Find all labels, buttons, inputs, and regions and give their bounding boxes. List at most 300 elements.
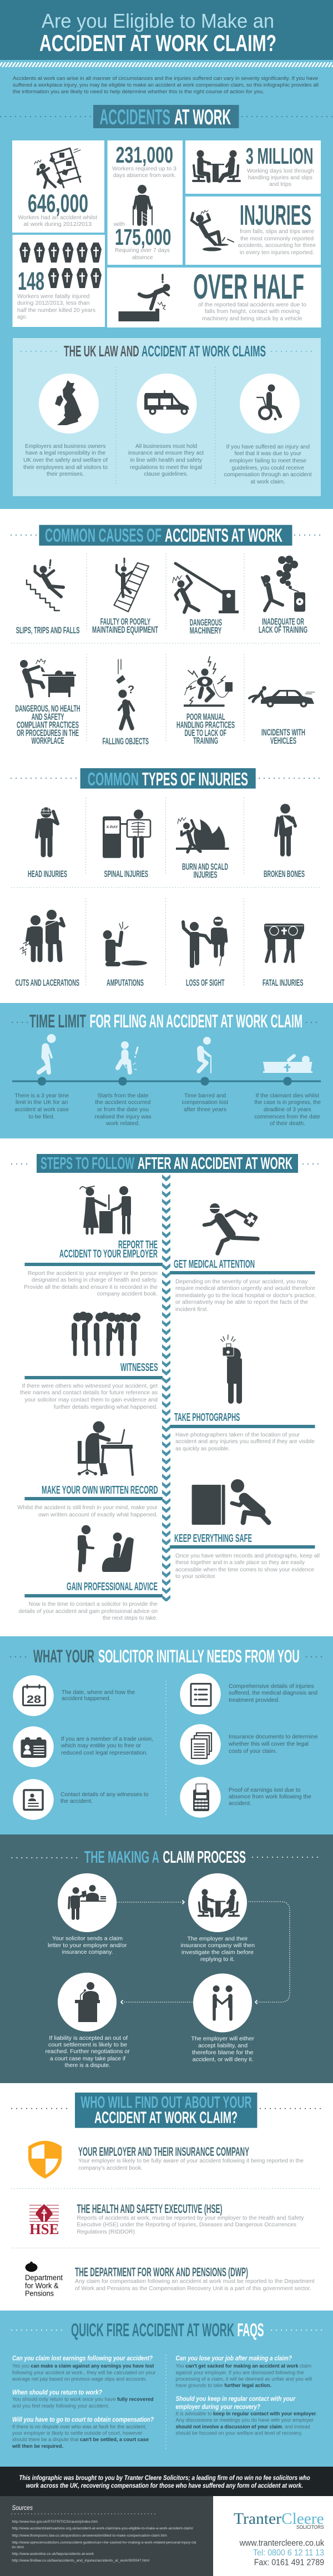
stat caption: and trips <box>269 182 291 188</box>
step heading: MAKE YOUR OWN WRITTEN RECORD <box>42 1484 158 1496</box>
panel: the making a claim process <box>0 1834 333 2083</box>
panel: time limit <box>0 1003 333 1138</box>
stat caption: of the reported fatal accidents were due to <box>198 302 306 308</box>
panel: over half <box>107 268 321 327</box>
faq: losing your job: have grounds to take further legal action. <box>175 2383 271 2388</box>
faq: regular contact: Should you keep in regular contact with your <box>175 2395 296 2403</box>
step text: company accident book. <box>97 1291 158 1297</box>
text: proof of earnings: accident. <box>229 1801 251 1807</box>
faq: going to court: will then be required. <box>12 2443 63 2449</box>
step text: the next steps to take. <box>103 1615 158 1621</box>
text: claim letter <box>48 1936 127 1955</box>
heading: common types of injuries: COMMON <box>88 769 139 789</box>
faq: going to court: your employer is likely to settle outside of court, however <box>12 2431 142 2436</box>
stat caption <box>247 168 314 188</box>
stat caption: absence <box>132 255 153 261</box>
step text <box>175 1553 320 1580</box>
text: settlement: court settlement is likely to be <box>48 2042 127 2048</box>
icon: person with knee injury <box>118 1041 138 1072</box>
label: SPINAL INJURIES <box>104 869 148 879</box>
faq: regular contact: Any discussions or meetings you do have with your employer <box>175 2417 314 2423</box>
stat caption: days absence from work. <box>113 173 176 179</box>
text: start date: realised the injury was <box>95 1114 152 1120</box>
text: claim letter: insurance company. <box>62 1949 113 1955</box>
logo: Tranter Cleere Solicitors: SOLICITORS <box>296 2524 324 2530</box>
logo: DWP: Department <box>25 2273 63 2282</box>
source links: http://www.asdonline.co.uk/faqs/accidents-at-work <box>12 2552 94 2556</box>
stat caption <box>238 229 316 256</box>
panel: light blue introduction background <box>0 67 333 509</box>
icon: person helping injured person <box>20 910 64 960</box>
heading: claim process: CLAIM PROCESS <box>163 1847 246 1867</box>
text: investigation: replying to it. <box>200 1957 235 1963</box>
label: CUTS AND LACERATIONS <box>16 977 79 988</box>
label: OR PROCEDURES IN THE <box>17 728 79 738</box>
text: investigation: investigate the claim before <box>181 1950 254 1956</box>
heading: steps to follow <box>12 1153 321 1173</box>
item: department for work and pensions <box>25 2261 315 2298</box>
stat caption <box>112 166 176 179</box>
text: liability decision: The employer will either <box>191 2036 255 2042</box>
item text: Your employer is likely to be fully aware of your accident following it being reported in the <box>78 2158 304 2164</box>
item text <box>75 2278 315 2292</box>
panel: 231,000 and 175,000 absences <box>108 140 183 265</box>
icon: person injured at a saw <box>20 659 76 697</box>
heading: accidents at work: ACCIDENTS <box>100 105 170 129</box>
stat: 231,000: 231,000 <box>115 142 173 168</box>
icon: list of details <box>180 1673 221 1715</box>
step text: incident first. <box>175 1307 208 1313</box>
stat caption: Working days lost through <box>247 168 314 174</box>
stat caption: handling injuries and slips <box>248 175 312 181</box>
step text: Once you have written records and photographs, keep all <box>175 1553 320 1559</box>
text: proof of earnings: Proof of earnings lost due to <box>229 1787 301 1793</box>
label <box>16 703 80 746</box>
step text: to your solicitor. <box>175 1574 216 1580</box>
text: compensation eligibility: compensation through an accident <box>224 472 312 478</box>
icon: calculator <box>180 1777 221 1818</box>
item text: company's accident book. <box>78 2165 143 2171</box>
step: get medical attention <box>170 1203 316 1313</box>
label: DANGEROUS <box>190 617 222 628</box>
heading: accidents at work <box>1 105 333 129</box>
icon: witness contact card <box>13 1779 54 1820</box>
stat caption: from falls, slips and trips were <box>240 229 314 235</box>
cause: slips, trips and falls <box>16 560 80 636</box>
stat caption <box>115 248 170 261</box>
faq: losing your job <box>175 2355 312 2388</box>
icon: calendar <box>13 1675 54 1716</box>
panel: what your solicitor needs <box>0 1636 333 1834</box>
step text: details of your accident and gain professional advice on <box>19 1609 158 1615</box>
icon: two people at a table <box>193 150 240 182</box>
text: claimant death: If the claimant dies whilst <box>256 1093 319 1099</box>
icon: elderly person with cane <box>199 1037 211 1073</box>
logo: Tranter Cleere Solicitors: Cleere <box>281 2510 324 2528</box>
text: injury details: Comprehensive details of injuries <box>229 1683 314 1690</box>
label <box>176 712 235 746</box>
text: start date <box>95 1093 152 1127</box>
label <box>92 617 158 635</box>
intro text: Accidents at work can arise in all manner of circumstances and the injuries suffered can vary in severity significantly. If you have <box>13 75 318 82</box>
stat caption: during 2012/2013, less than <box>17 300 90 306</box>
text: insurance duty: All businesses must hold <box>135 443 197 450</box>
icon: person guiding blind person <box>183 917 226 966</box>
stat caption: Workers had an accident whilst <box>18 215 97 221</box>
step text: Whilst the accident is still fresh in your mind, make your <box>17 1505 158 1511</box>
panel: 148 fatally injured <box>12 235 105 327</box>
text: date of accident: accident happened. <box>62 1696 110 1702</box>
faq: lost earnings: following your accident at work., they will be calculated on your <box>12 2370 155 2376</box>
item: health and safety executive <box>29 2202 304 2237</box>
heading: UK law and accident at work claims: THE UK LAW AND <box>64 342 139 360</box>
icon: insurance documents <box>180 1724 221 1765</box>
injury: fatal injuries <box>263 924 304 988</box>
text: time barred <box>182 1093 228 1113</box>
stat: 646,000: 646,000 <box>28 189 88 218</box>
heading: claim process <box>12 1847 321 1867</box>
icon: group of witnesses <box>73 1312 140 1354</box>
title <box>39 9 276 56</box>
icon: person being electrocuted <box>184 657 233 707</box>
text: insurance duty: regulations to meet the legal <box>130 465 202 471</box>
label <box>259 617 307 635</box>
text: investigation <box>181 1936 255 1963</box>
text: proof of earnings: absence from work following the <box>229 1794 311 1800</box>
faq: losing your job: against your employer. If you are dismissed following the <box>175 2370 304 2376</box>
contact details <box>239 2539 325 2568</box>
text: witness details: Contact details of any witnesses to <box>60 1792 149 1798</box>
cause: inadequate training <box>259 556 307 635</box>
heading: FAQs: FAQS <box>238 2320 264 2340</box>
text: employers responsibility: have a legal responsibility in the <box>26 450 105 456</box>
text: date of accident <box>62 1690 135 1702</box>
step text: these together and in a safe place so they are easily <box>175 1560 305 1566</box>
label: AMPUTATIONS <box>107 977 144 988</box>
arrow: to decision <box>249 1902 290 2004</box>
stat: 148: 148 <box>18 267 44 295</box>
text: time barred: Time barred and <box>184 1093 226 1099</box>
cause: incidents with vehicles <box>249 686 315 746</box>
cause: non-compliant practices <box>16 659 80 746</box>
icon: person at a safe <box>192 1479 269 1525</box>
label: LOSS OF SIGHT <box>186 977 225 988</box>
stat caption: machinery and being struck by a vehicle <box>202 316 302 322</box>
faq: regular contact <box>175 2395 317 2436</box>
text: claimant death: of their death. <box>270 1121 305 1127</box>
panel: 3 million days lost <box>185 140 321 194</box>
stat: 175,000: 175,000 <box>115 224 171 250</box>
icon: ambulance <box>137 374 196 433</box>
text: employers responsibility: their premises. <box>47 471 84 477</box>
step text: as quickly as possible. <box>175 1446 230 1452</box>
label: COMPLIANT PRACTICES <box>17 720 79 730</box>
step text <box>20 1383 158 1410</box>
step text <box>19 1601 158 1621</box>
item: employer and insurer <box>28 2141 304 2179</box>
faq: return to work <box>12 2388 154 2409</box>
step: gain professional advice <box>19 1525 163 1621</box>
logo: DWP: for Work & <box>25 2281 59 2290</box>
logo: Tranter Cleere Solicitors: Tranter <box>234 2510 281 2528</box>
faq: lost earnings: average net pay based on previous wage slips and accounts. <box>12 2376 147 2382</box>
label: HANDLING PRACTICES <box>176 720 235 730</box>
logo: DWP: Pensions <box>25 2289 54 2298</box>
text: start date: Starts from the date <box>98 1093 149 1099</box>
logo: Tranter Cleere Solicitors <box>234 2510 324 2530</box>
text: 3 year limit: accident at work case <box>14 1107 69 1113</box>
text: liability decision: accept liability, and <box>198 2043 248 2049</box>
icon: person at a lectern <box>58 1973 117 2031</box>
icon: union membership card <box>13 1726 54 1767</box>
icon: rows of coffins <box>19 243 102 288</box>
faq: return to work: You should only return to work once you have fully recovered <box>12 2397 154 2402</box>
injury: amputations <box>103 922 147 988</box>
label <box>182 861 228 880</box>
label: WORKPLACE <box>32 735 64 746</box>
source links: http://www.accidentclaimsadvice.org.uk/accident-at-work-claim/are-you-eligible-to-make-a-work-accident-claim/ <box>12 2527 193 2530</box>
text: witness details <box>60 1792 149 1804</box>
cause: falling objects <box>102 659 149 747</box>
item text <box>77 2215 304 2235</box>
heading: solicitor needs <box>11 1646 323 1666</box>
icon: medic running <box>204 1203 258 1253</box>
icon: kneeling person and blood pool <box>103 922 147 966</box>
step heading: WITNESSES <box>120 1362 158 1374</box>
label <box>190 617 222 636</box>
panel: sources <box>0 2496 213 2576</box>
text: compensation eligibility: at work claim. <box>251 479 285 485</box>
item text: Regulations (RIDDOR) <box>77 2229 135 2235</box>
step text: further details regarding what happened. <box>54 1404 158 1410</box>
step divider bar <box>24 1263 163 1266</box>
text: insurance documents <box>228 1734 318 1755</box>
arrow: to settlement <box>121 2000 192 2004</box>
label: INJURIES <box>194 870 218 880</box>
text: with: with <box>113 221 125 228</box>
label: TRAINING <box>193 735 218 746</box>
icon: object falling on person <box>116 659 134 728</box>
step text: Now is the time to contact a solicitor to provide the <box>29 1601 158 1607</box>
faq: losing your job: processing of a claim, it will be deemed as unfair and you will <box>175 2376 312 2382</box>
icon: solicitor sends letter <box>58 1873 117 1932</box>
icon: person writing on a laptop <box>78 1421 133 1475</box>
text: settlement: If liability is accepted an out of <box>49 2035 128 2041</box>
step heading: GAIN PROFESSIONAL ADVICE <box>67 1581 158 1593</box>
stat caption: Workers required up to 3 <box>112 166 176 172</box>
cause: poor manual handling <box>176 657 235 746</box>
text: injury details <box>229 1683 317 1703</box>
item text <box>78 2158 304 2171</box>
icon: object falling on person: ? <box>128 684 134 696</box>
injury: head injuries <box>28 807 67 879</box>
sources heading: Sources <box>12 2504 33 2512</box>
step text: Depending on the severity of your accident, you may <box>175 1279 307 1285</box>
step divider bar <box>24 1376 163 1379</box>
text: claimant death: the case is in progress, the <box>254 1100 321 1106</box>
text: witness details: the accident. <box>60 1798 93 1804</box>
step text: Report the accident to your employer or the person <box>28 1271 158 1277</box>
text: liability decision: accident, or will deny it. <box>193 2057 253 2063</box>
stat caption: Requiring over 7 days <box>115 248 170 254</box>
label: FAULTY OR POORLY <box>100 617 150 627</box>
intro text: the information you are likely to need to help determine whether this is the right course of action for you. <box>13 89 264 95</box>
stat caption <box>17 294 95 320</box>
heading: solicitor needs: WHAT YOUR <box>33 1646 94 1666</box>
icon: person in wheelchair <box>240 374 300 433</box>
text: liability decision: therefore blame for the <box>192 2050 254 2056</box>
text: investigation: insurance company will then <box>181 1943 255 1949</box>
text: insurance duty <box>128 443 204 477</box>
step: keep everything safe <box>170 1479 320 1580</box>
icon: person in coffin <box>263 1056 312 1073</box>
faq: going to court: If there is no dispute over who was at fault for the accident, <box>12 2424 147 2429</box>
step text: accessible when the time comes to show your evidence <box>175 1567 314 1573</box>
stat caption: Workers were fatally injured <box>17 294 90 300</box>
icon: barrier hitting person <box>173 563 239 613</box>
icon: photographer <box>221 1335 242 1401</box>
text: claimant death: deadline of 3 years <box>264 1107 311 1113</box>
injury: broken bones <box>264 804 305 879</box>
text: start date: or from the date you <box>97 1107 149 1113</box>
label: SLIPS, TRIPS AND FALLS <box>16 625 80 636</box>
text: insurance duty: clause guidelines. <box>144 471 188 477</box>
text: date of accident: The date, where and how the <box>62 1690 135 1696</box>
text: time barred: compensation lost <box>182 1100 228 1106</box>
text: insurance documents: Insurance documents to determine <box>229 1734 318 1740</box>
step heading <box>59 1239 158 1261</box>
panel: 646,000 workers <box>12 140 104 233</box>
text: start date: the accident occurred <box>95 1100 150 1106</box>
text: claim letter: Your solicitor sends a claim <box>52 1936 123 1942</box>
stat caption: accidents, accounting for three <box>238 243 316 249</box>
heading: common causes of accidents at work <box>11 525 320 546</box>
icon: standing adviser and seated client <box>78 1525 134 1572</box>
icon: person falling from height <box>119 275 170 321</box>
stat caption: half the number killed 20 years <box>17 307 95 314</box>
icon: map of the UK <box>39 374 99 433</box>
text: insurance duty: insurance and ensure they act <box>128 450 204 456</box>
step: report the accident <box>24 1186 163 1297</box>
stat caption: at work during 2012/2013 <box>23 221 92 228</box>
item text: Reports of accidents at work, must be reported by your employer to the Health and Safety <box>77 2215 304 2221</box>
text: employers responsibility: Employers and business owners <box>25 443 106 450</box>
text: liability decision <box>191 2036 255 2063</box>
logo: HSE: HSE <box>29 2221 59 2237</box>
contact details: Tel: 0800 6 12 11 13 <box>253 2548 324 2558</box>
faq: lost earnings <box>12 2355 155 2382</box>
icon: person with arm sling <box>276 804 295 854</box>
step text: your solicitor may contact them to gain evidence and <box>24 1397 158 1403</box>
heading: time limit: TIME LIMIT <box>29 1011 86 1031</box>
arrow: chevron timeline <box>162 1174 170 1601</box>
text: settlement: a court case may take place if <box>50 2056 125 2062</box>
label: HEAD INJURIES <box>28 869 67 879</box>
source links: http://www.findlaw.co.uk/law/accidents_and_injuries/accidents_at_work/500047.html <box>12 2559 149 2563</box>
step divider bar <box>170 1545 315 1549</box>
label: VEHICLES <box>270 735 296 746</box>
heading: steps to follow: STEPS TO FOLLOW <box>41 1153 134 1173</box>
heading: accidents at work: AT WORK <box>174 105 231 129</box>
step text <box>175 1279 316 1313</box>
faq: going to court: should there be a dispute that can't be settled, a court case <box>12 2437 149 2442</box>
text: time barred: after three years <box>184 1107 226 1113</box>
icon: person on falling ladder <box>114 558 149 612</box>
step text: accident and any injuries you suffered if they are visible <box>175 1439 315 1445</box>
text: employers responsibility <box>23 443 108 477</box>
step divider bar <box>24 1497 163 1500</box>
label: POOR MANUAL <box>186 712 225 722</box>
item text: of Work and Pensions as the Compensation Recovery Unit is a part of this government sector. <box>75 2286 311 2292</box>
text: 3 year limit: to be filed. <box>29 1114 55 1120</box>
injury: burn and scald injuries <box>176 818 229 880</box>
stat caption: in every ten injuries reported. <box>240 250 314 256</box>
step text <box>17 1505 158 1518</box>
icon: person slipping on a puddle <box>191 210 234 251</box>
faq: return to work: and you feel ready following your accident. <box>12 2403 109 2409</box>
cause: faulty equipment <box>92 558 158 635</box>
text: compensation eligibility: feel that it was due to your <box>234 451 302 457</box>
faq: losing your job: You can't get sacked for making an accident at work claim <box>175 2363 311 2369</box>
stat caption <box>18 215 97 228</box>
step heading: KEEP EVERYTHING SAFE <box>174 1533 252 1545</box>
faq: going to court <box>12 2416 154 2449</box>
label: AND SAFETY <box>32 712 64 722</box>
step text: or alternatively may be able to report the facts of the <box>175 1299 308 1305</box>
step text <box>175 1432 315 1452</box>
faq: losing your job: Can you lose your job after making a claim? <box>175 2355 292 2362</box>
text: insurance documents: costs of your claim. <box>229 1748 277 1755</box>
icon: orange shield <box>28 2141 62 2179</box>
icon: pallbearers carrying coffin <box>264 924 304 961</box>
heading: claim process: THE MAKING A <box>84 1847 159 1867</box>
text: 3 year limit: There is a 3 year time <box>14 1093 69 1099</box>
text: compensation eligibility: If you have suffered an injury and <box>226 444 310 450</box>
step text: require medical attention urgently and would therefore <box>175 1286 315 1292</box>
cause: dangerous machinery <box>173 563 239 636</box>
text: proof of earnings <box>229 1787 311 1807</box>
step heading: ACCIDENT TO YOUR EMPLOYER <box>59 1248 158 1261</box>
label: DUE TO LACK OF <box>184 728 226 738</box>
text: claimant death: commences from the date <box>254 1114 320 1120</box>
injury: loss of sight <box>183 917 226 988</box>
heading: common causes of accidents at work: COMMON CAUSES OF <box>45 525 162 546</box>
source links: http://www.spencerssolicitors.com/accident-guides/can-i-be-sacked-for-making-a-work-related-personal-injury-cla <box>12 2541 196 2545</box>
text: injury details: suffered, the medical diagnosis and <box>229 1690 317 1696</box>
text: compensation eligibility: employer failing to meet these <box>230 458 306 464</box>
faq: regular contact: It is advisable to keep in regular contact with your employer. <box>175 2411 317 2417</box>
step divider bar <box>170 1425 315 1428</box>
timeline line and markers <box>12 1077 321 1086</box>
label <box>261 727 305 746</box>
faq: return to work: When should you return to work? <box>12 2388 103 2396</box>
faq: going to court: Will you have to go to court to obtain compensation? <box>12 2416 154 2423</box>
label: MAINTAINED EQUIPMENT <box>92 624 158 635</box>
text: employers responsibility: their employees and all visitors to <box>23 465 108 471</box>
injury: spinal injuries <box>103 809 150 879</box>
panel: injuries from falls <box>185 196 321 265</box>
icon: injured person <box>39 1034 56 1072</box>
icon: person with bandaged head <box>37 807 58 855</box>
step text: Provide all the details and ensure it is recorded in the <box>24 1284 158 1290</box>
heading: who will find out: ACCIDENT AT WORK CLAIM? <box>94 2109 238 2127</box>
heading: common types of injuries <box>11 768 320 789</box>
faq: regular contact: should not involve a discussion of your claim, and instead <box>175 2424 310 2429</box>
faq: regular contact: employer during your recovery? <box>175 2403 261 2411</box>
icon: person escaping toxic smoke <box>262 556 305 612</box>
label: FALLING OBJECTS <box>102 736 149 747</box>
text: 3 year limit: limit in the UK for an <box>16 1100 68 1106</box>
